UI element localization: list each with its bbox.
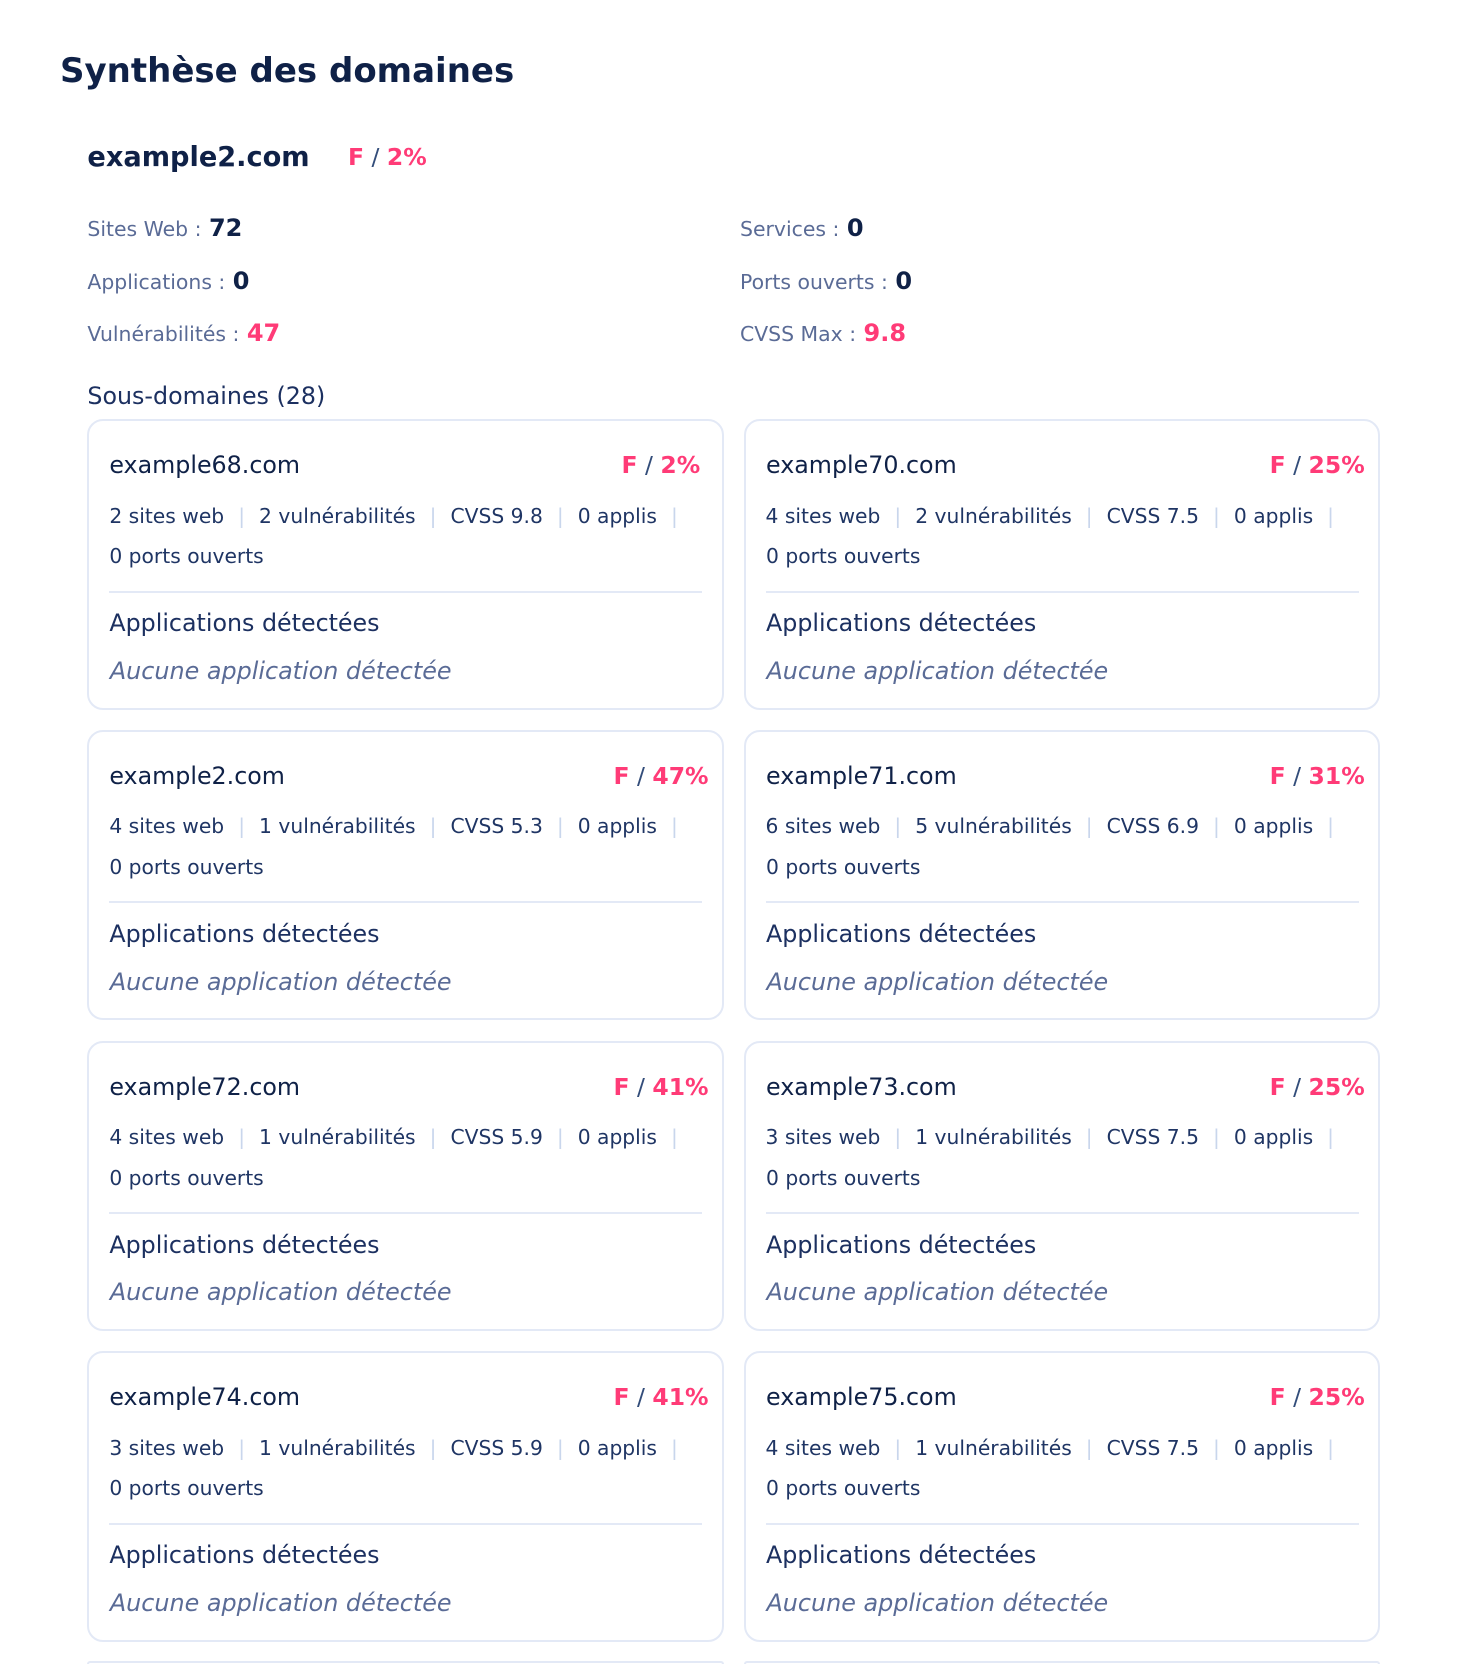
card: example75.com: F / 25%: [1270, 1383, 1365, 1411]
card: example74.com: 3 sites web | 1 vulnérabilités | CVSS 5.9 | 0 applis |: [109, 1436, 678, 1460]
card: example74.com: F / 41%: [613, 1383, 709, 1411]
card: example71.com: example71.com: [766, 762, 957, 790]
stat: services: Services : 0: [740, 214, 864, 242]
card: example74.com: Applications détectées: [109, 1541, 380, 1569]
card: example71.com: F / 31%: [1270, 762, 1365, 790]
card: example68.com: F / 2%: [621, 451, 700, 479]
card: example68.com: Aucune application détectée: [110, 657, 452, 685]
card: example70.com: F / 25%: [1270, 451, 1365, 479]
card: example73.com: 0 ports ouverts: [766, 1166, 920, 1190]
card: example68.com: Applications détectées: [109, 609, 380, 637]
card: example2.com: Aucune application détectée: [110, 968, 452, 996]
card: example73.com: 3 sites web | 1 vulnérabilités | CVSS 7.5 | 0 applis |: [766, 1125, 1334, 1149]
card: example74.com: Aucune application détectée: [110, 1589, 452, 1617]
card: example68.com: 2 sites web | 2 vulnérabilités | CVSS 9.8 | 0 applis |: [109, 504, 678, 528]
card: example2.com: 4 sites web | 1 vulnérabilités | CVSS 5.3 | 0 applis |: [109, 814, 678, 838]
card: example71.com: 6 sites web | 5 vulnérabilités | CVSS 6.9 | 0 applis |: [766, 814, 1334, 838]
card: example2.com: Applications détectées: [109, 920, 380, 948]
card: example71.com: Applications détectées: [766, 920, 1036, 948]
card: example75.com: 4 sites web | 1 vulnérabilités | CVSS 7.5 | 0 applis |: [766, 1436, 1334, 1460]
card: example70.com: example70.com: [766, 451, 957, 479]
card: example68.com: [87, 419, 724, 710]
card: example70.com: Aucune application détectée: [766, 657, 1108, 685]
card: example72.com: 4 sites web | 1 vulnérabilités | CVSS 5.9 | 0 applis |: [109, 1125, 678, 1149]
card: example68.com: 0 ports ouverts: [109, 544, 264, 568]
card: example75.com: Aucune application détectée: [766, 1589, 1108, 1617]
card: example68.com: example68.com: [109, 451, 300, 479]
title: Synthèse des domaines: [60, 50, 514, 90]
stat: sites web: Sites Web : 72: [87, 214, 242, 242]
card: example72.com: example72.com: [109, 1073, 300, 1101]
card: example2.com: example2.com: [109, 762, 285, 790]
card: example75.com: example75.com: [766, 1383, 957, 1411]
card: example71.com: Aucune application détectée: [766, 968, 1108, 996]
card: example74.com: [87, 1351, 724, 1642]
card: example2.com: [87, 730, 724, 1020]
card: example73.com: F / 25%: [1270, 1073, 1365, 1101]
card: example70.com: 0 ports ouverts: [766, 544, 920, 568]
card: example72.com: F / 41%: [613, 1073, 709, 1101]
stat: ports ouverts: Ports ouverts : 0: [740, 267, 912, 295]
card: example73.com: example73.com: [766, 1073, 957, 1101]
card: example72.com: 0 ports ouverts: [109, 1166, 264, 1190]
card: example2.com: F / 47%: [613, 762, 709, 790]
card: example74.com: example74.com: [109, 1383, 300, 1411]
card: example75.com: Applications détectées: [766, 1541, 1036, 1569]
stat: applications: Applications : 0: [87, 267, 249, 295]
card: example75.com: 0 ports ouverts: [766, 1476, 920, 1500]
card: example72.com: Applications détectées: [109, 1231, 380, 1259]
card: next row right (cut off): [744, 1661, 1380, 1664]
card: example72.com: [87, 1041, 724, 1331]
card: example71.com: 0 ports ouverts: [766, 855, 920, 879]
domain name: example2.com: [87, 142, 310, 173]
card: example70.com: Applications détectées: [766, 609, 1036, 637]
stat: vulnérabilités: Vulnérabilités : 47: [87, 319, 280, 347]
card: example75.com: [744, 1351, 1380, 1642]
stat: CVSS max: CVSS Max : 9.8: [740, 319, 906, 347]
card: example2.com: 0 ports ouverts: [109, 855, 264, 879]
subdomains heading: Sous-domaines (28): [87, 382, 325, 410]
card: example70.com: [744, 419, 1380, 710]
card: example73.com: Applications détectées: [766, 1231, 1036, 1259]
card: example71.com: [744, 730, 1380, 1020]
card: example72.com: Aucune application détectée: [110, 1278, 452, 1306]
card: next row left (cut off): [87, 1661, 724, 1664]
domain grade: F / 2%: [348, 143, 427, 171]
card: example73.com: Aucune application détectée: [766, 1278, 1108, 1306]
card: example70.com: 4 sites web | 2 vulnérabilités | CVSS 7.5 | 0 applis |: [766, 504, 1334, 528]
card: example74.com: 0 ports ouverts: [109, 1476, 264, 1500]
card: example73.com: [744, 1041, 1380, 1331]
